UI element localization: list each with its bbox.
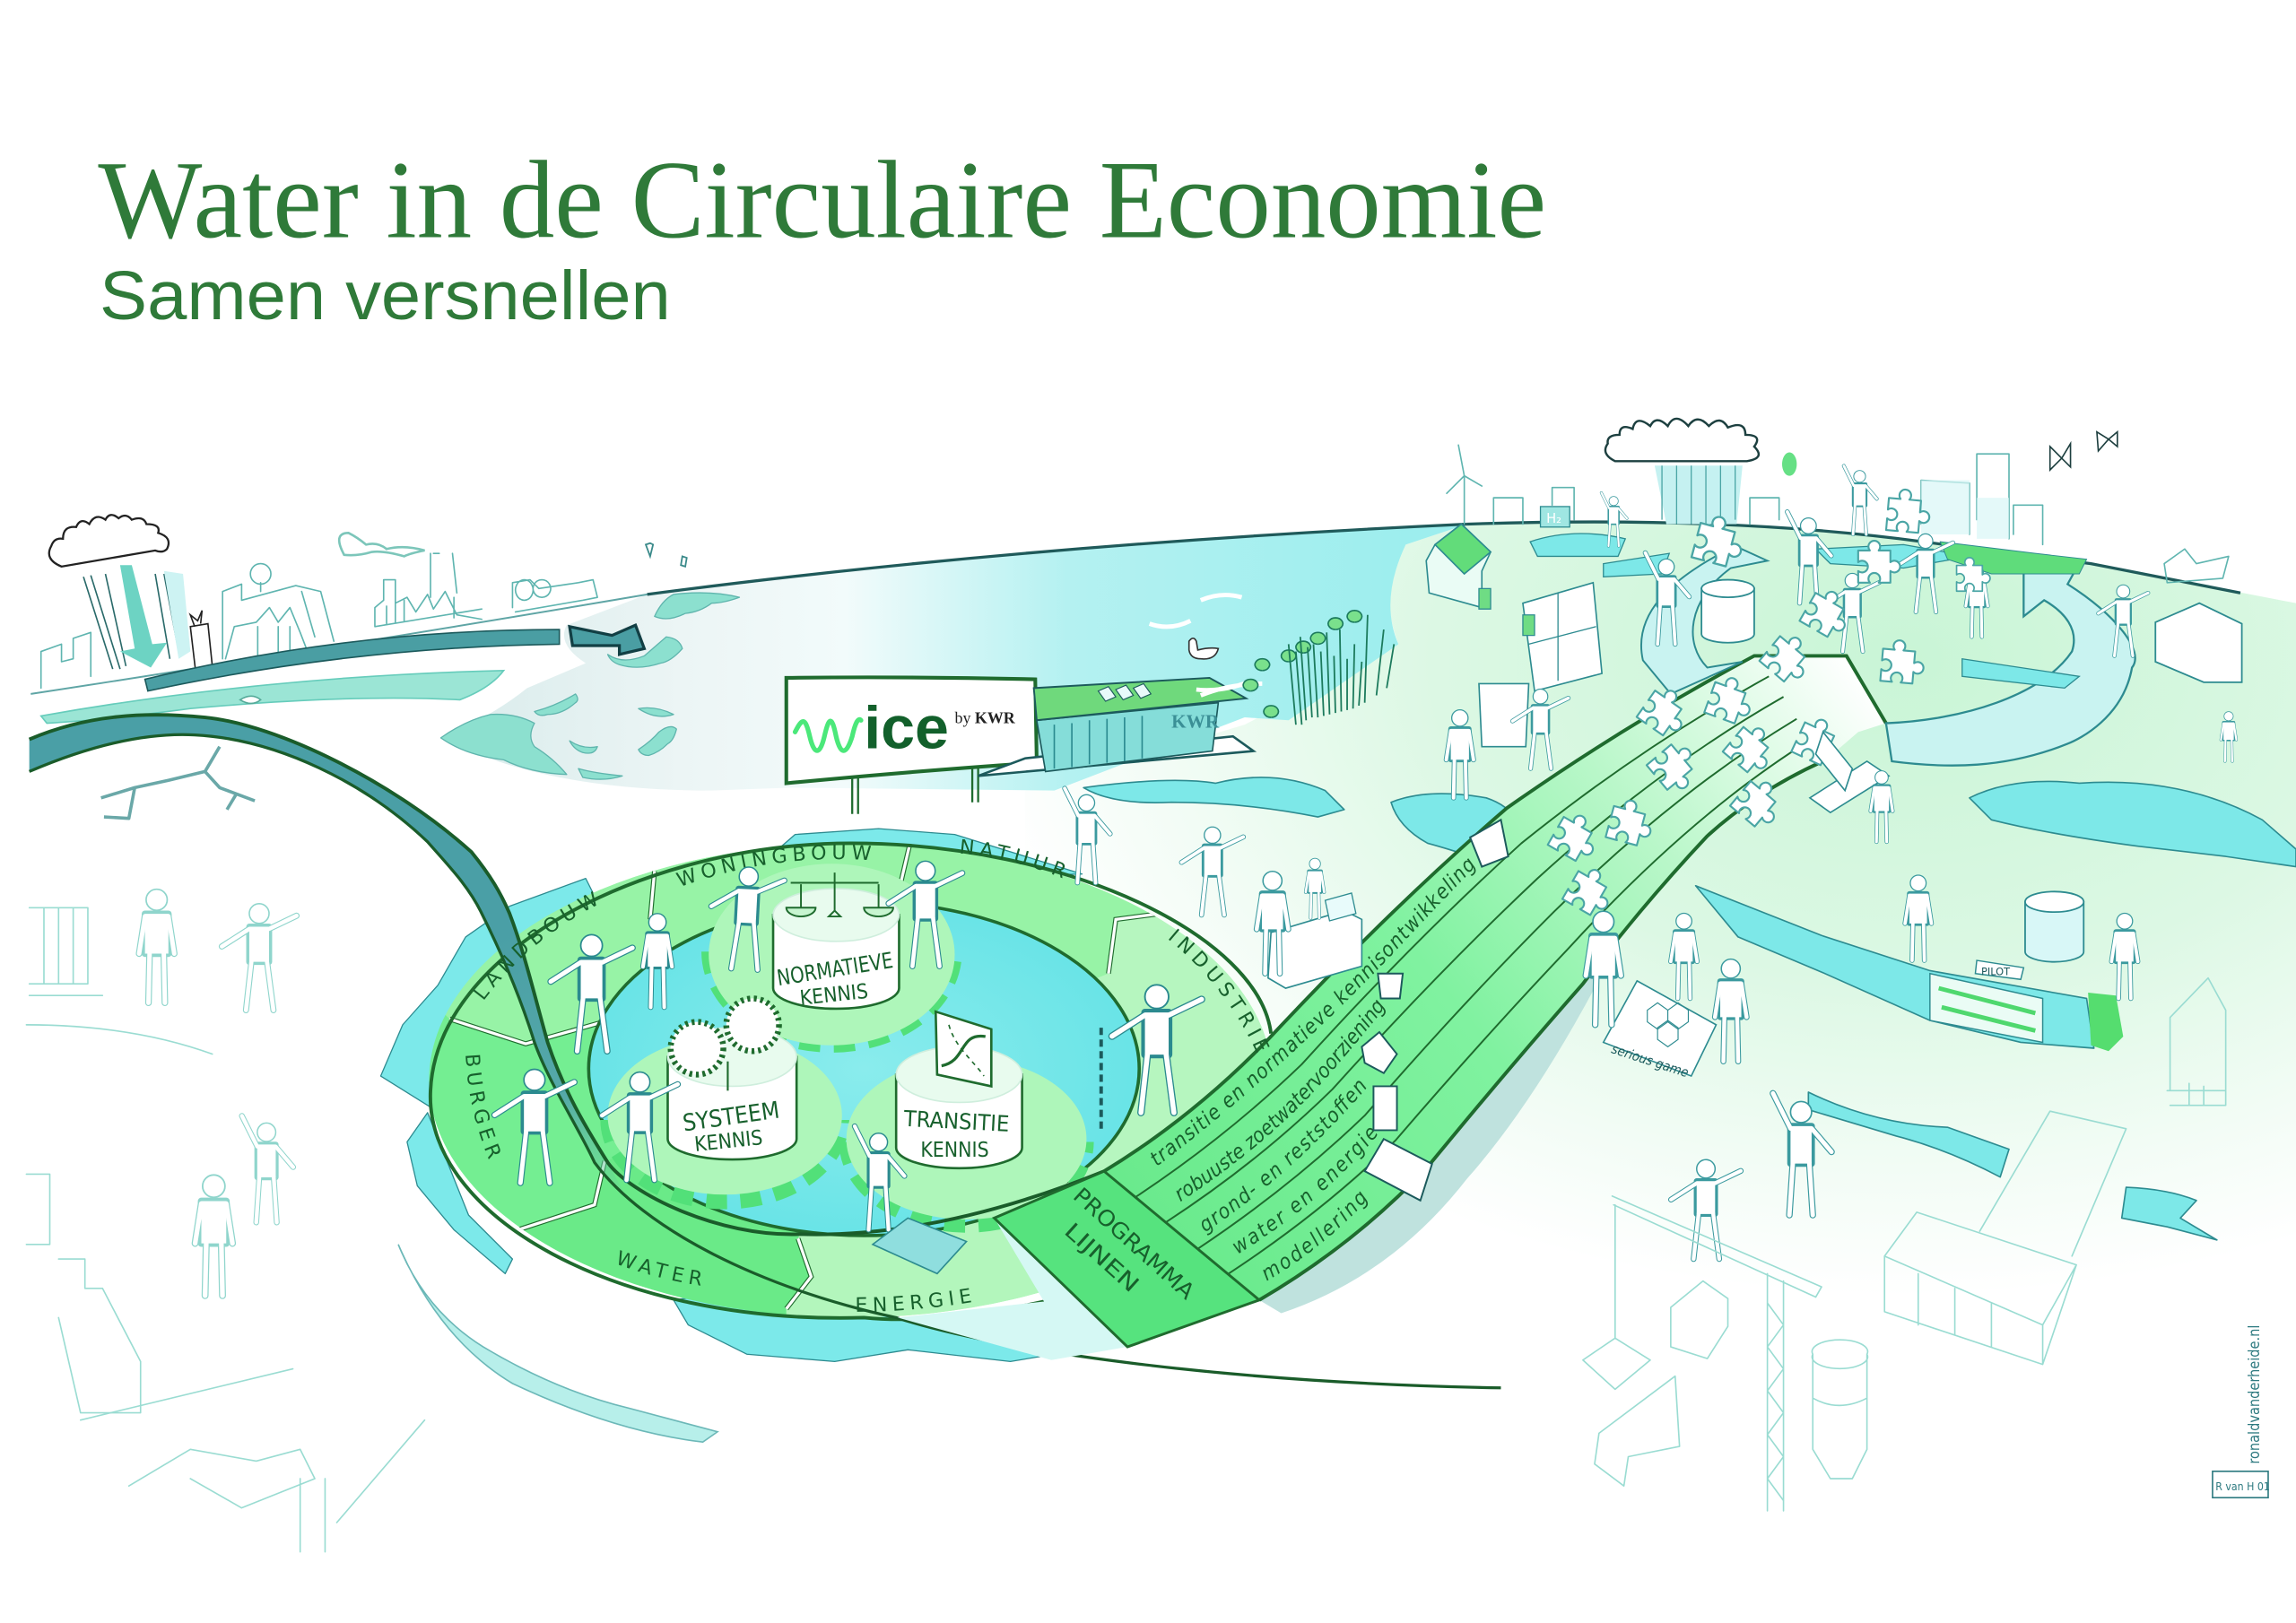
wice wave logo (796, 719, 861, 751)
gear: normatieve (709, 864, 954, 1046)
circular arrow left part (1641, 546, 1768, 694)
green bush at canal end (2088, 993, 2123, 1051)
gift icon (190, 611, 213, 676)
duck (1189, 638, 1218, 659)
people: faded left (139, 890, 297, 1296)
label: industrie: INDUSTRIE (1169, 929, 1270, 1053)
construction crane (1613, 1196, 1822, 1511)
lake with gradient (440, 525, 1467, 791)
artist signature (2213, 1471, 2270, 1497)
people: meadow (1065, 689, 2138, 1259)
segment: industrie (1067, 916, 1266, 1184)
label: programma lijnen: LIJNEN (1059, 1218, 1144, 1298)
ribbon edges (1104, 655, 1886, 1300)
circular arrow right part (1886, 568, 2135, 766)
segment: water (522, 1159, 809, 1315)
tank: by canal top (1701, 588, 1754, 643)
artist credit: ronaldvanderheide.nl (2246, 1325, 2264, 1464)
puzzle pieces held (1692, 488, 1990, 642)
segment: burger (429, 1015, 621, 1228)
cylinder: transitie kennis: KENNIS (920, 1139, 989, 1162)
label: energie: ENERGIE (857, 1288, 971, 1312)
subtitle: Samen versnellen (100, 258, 671, 334)
icon: battery (1373, 1086, 1397, 1130)
staff gauge (1100, 1028, 1102, 1130)
factory (375, 553, 482, 627)
river band top: arrow (145, 625, 644, 691)
label: water: WATER (619, 1250, 701, 1286)
segment: energie (786, 1222, 1039, 1317)
cylinder: normatieve kennis (773, 889, 899, 1011)
skyline right (1493, 453, 2043, 544)
label: burger: BURGER (465, 1055, 500, 1159)
icon: laptop (1365, 1139, 1432, 1201)
faint river lower left (398, 1245, 718, 1442)
icon: scales (787, 872, 893, 916)
people: top right (1601, 466, 2236, 761)
label: pilot: PILOT (1981, 965, 2010, 977)
ring base with segments (429, 845, 1266, 1317)
ponds around island (1083, 777, 2296, 1240)
box: programma lijnen (995, 1171, 1259, 1347)
buildings: houses and hospital (222, 564, 334, 659)
label: reststoffen: grond- en reststoffen (1202, 1081, 1367, 1236)
pond left centre (1391, 794, 1516, 864)
reeds and lily pads (1243, 611, 1394, 725)
lake islands left (440, 593, 739, 779)
tank: right group (2155, 603, 2242, 682)
people: ring (495, 861, 1202, 1229)
label: H2: H₂ (1546, 511, 1561, 526)
horizon line (30, 522, 2240, 694)
teal river band (30, 715, 1500, 1388)
artist signature: R van H 01 (2215, 1480, 2270, 1493)
faint buildings left (26, 907, 424, 1552)
cylinder: normatieve kennis: KENNIS (799, 980, 869, 1011)
small pond with fish (41, 671, 504, 724)
left city outlines (41, 632, 91, 688)
inner water circle (588, 902, 1139, 1236)
label: modellering: modellering (1263, 1191, 1369, 1280)
label: zoetwater: robuuste zoetwatervoorziening (1177, 999, 1386, 1202)
concrete frames (1583, 1281, 1728, 1486)
waves on lake (1150, 595, 1262, 696)
houses far right (2164, 549, 2229, 583)
KWR building sign: KWR (1171, 710, 1220, 732)
solar panel (873, 1218, 967, 1273)
flipchart (1479, 683, 1528, 747)
cylinder: normatieve kennis: NORMATIEVE (775, 947, 895, 991)
crack in dry ground (101, 747, 255, 819)
tractor (512, 580, 597, 612)
icon: bucket (1378, 974, 1403, 998)
icon: transition chart sign (935, 1011, 991, 1086)
wind turbine (1447, 445, 1482, 525)
butterflies small (646, 543, 687, 567)
pond far right (2122, 1187, 2217, 1240)
icon: small cogs (671, 998, 779, 1090)
label: energie: water en energie (1232, 1128, 1378, 1254)
church far right (2167, 978, 2226, 1106)
label: landbouw: LANDBOUW (474, 891, 596, 1000)
desk with screen (1810, 732, 1889, 812)
ribbon labels (1151, 858, 1476, 1280)
wice wordmark: ice (864, 694, 949, 761)
puzzle pieces on ribbon (1548, 629, 1926, 920)
table with scientists (1268, 893, 1361, 988)
big pond right (1970, 781, 2296, 867)
cylinder: transitie kennis (896, 1046, 1022, 1168)
cylinder: transitie kennis: TRANSITIE (902, 1106, 1010, 1137)
label: transitie: transitie en normatieve kennisontwikkeling (1151, 858, 1476, 1166)
silo (1812, 1340, 1867, 1479)
tanks (1701, 580, 2242, 962)
wetland strips top (1530, 534, 2079, 688)
title: Water in de Circulaire Economie (98, 138, 1546, 262)
KWR building (978, 678, 1254, 776)
top right cloud with rain (1605, 419, 1759, 525)
smoke cloud (339, 533, 424, 556)
ribbon dividers (1135, 676, 1812, 1273)
ribbon shadow (1259, 934, 1622, 1314)
pale wedge below ring (898, 1218, 1127, 1360)
label: woningbouw: WONINGBOUW (675, 845, 872, 886)
label: programma lijnen: PROGRAMMA (1068, 1182, 1200, 1305)
icon: sign at ribbon (1470, 820, 1509, 867)
gear: transitie (847, 1058, 1086, 1222)
ribbon arrow: programme lines (995, 655, 1886, 1347)
butterflies (2050, 432, 2118, 470)
rain cloud left (49, 515, 190, 669)
greenhouse and shed (1426, 525, 1602, 691)
arrow: rain down (120, 565, 167, 668)
ribbon icons (1361, 820, 1509, 1201)
billboard wice (787, 677, 1037, 814)
ring labels (465, 839, 1270, 1312)
island water around ring (380, 829, 1083, 1361)
serious game board (1604, 981, 1716, 1081)
land: right side green ground (1025, 522, 2296, 1610)
long canal (1696, 886, 2094, 1048)
by KWR: by KWR (954, 709, 1016, 727)
pilot bed (1930, 960, 2043, 1042)
construction site: buildings (1884, 1111, 2126, 1365)
cylinder: systeem kennis: KENNIS (693, 1126, 764, 1157)
label: serious game: serious game (1610, 1042, 1691, 1081)
icon: soil block (1361, 1032, 1397, 1073)
cylinder: systeem kennis (667, 1028, 796, 1159)
tank: pilot (2025, 902, 2083, 962)
green strip (1940, 542, 2087, 574)
canal lower right (1808, 1092, 2009, 1177)
pond by sign (1083, 777, 1344, 817)
ring outline (430, 843, 1271, 1319)
gear: systeem (608, 1037, 842, 1199)
cylinder: systeem kennis: SYSTEEM (681, 1098, 781, 1137)
label: natuur: NATUUR (961, 839, 1065, 879)
hydrogen tank (1541, 507, 1570, 527)
